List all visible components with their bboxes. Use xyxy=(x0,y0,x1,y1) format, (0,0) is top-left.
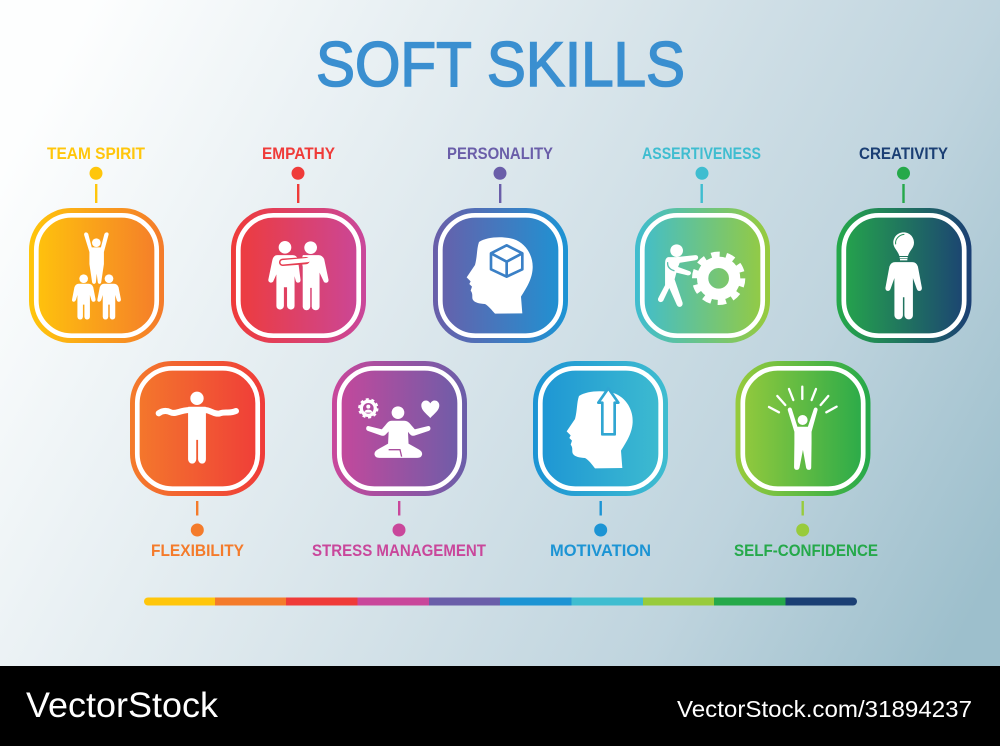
connector dot xyxy=(796,524,809,536)
heading: team spirit: TEAM SPIRIT xyxy=(47,145,145,163)
panel: flexibility xyxy=(130,361,265,560)
card xyxy=(332,361,467,496)
panel: stress management xyxy=(312,361,486,560)
heading: self-confidence: SELF-CONFIDENCE xyxy=(734,542,878,560)
icon: head with cube xyxy=(467,237,533,314)
icon: meditating person with gear and heart xyxy=(359,399,439,457)
connector dot xyxy=(594,524,607,536)
card xyxy=(231,208,366,343)
connector dot xyxy=(494,167,506,180)
heading: creativity: CREATIVITY xyxy=(859,145,948,163)
panel: team spirit xyxy=(29,145,164,343)
connector dot xyxy=(696,167,708,180)
connector line xyxy=(902,184,905,203)
icon: two people, arm on shoulder xyxy=(269,241,328,310)
icon: person pushing gear xyxy=(659,244,742,306)
card xyxy=(533,361,668,496)
connector line xyxy=(499,184,501,203)
panel: empathy xyxy=(231,145,366,343)
card xyxy=(736,361,870,496)
connector dot xyxy=(191,524,204,536)
connector dot xyxy=(292,167,304,180)
card xyxy=(433,208,568,343)
legend colour bar xyxy=(144,598,857,606)
heading: assertiveness: ASSERTIVENESS xyxy=(642,145,761,163)
connector line xyxy=(196,501,198,516)
icon: person with wavy arms xyxy=(159,392,236,463)
connector line xyxy=(398,501,400,516)
heading: personality: PERSONALITY xyxy=(447,145,553,163)
panel: assertiveness xyxy=(635,145,770,343)
icon: person with light bulb head xyxy=(886,232,921,319)
connector line xyxy=(600,501,602,516)
panel: personality xyxy=(433,145,568,343)
card xyxy=(130,361,265,496)
panel: self-confidence xyxy=(734,361,878,560)
card xyxy=(29,208,164,343)
title: SOFT SKILLS xyxy=(316,30,685,100)
connector line xyxy=(802,501,804,516)
connector dot xyxy=(897,167,910,180)
connector line xyxy=(297,184,299,203)
card xyxy=(836,208,972,343)
footer band xyxy=(0,666,1000,746)
connector dot xyxy=(392,524,406,536)
heading: empathy: EMPATHY xyxy=(262,145,335,163)
connector line xyxy=(700,184,703,203)
panel: motivation xyxy=(533,361,668,560)
icon: person with raised arms and rays xyxy=(769,387,837,469)
heading: stress management: STRESS MANAGEMENT xyxy=(312,542,486,560)
icon: three people pyramid xyxy=(73,233,120,319)
heading: flexibility: FLEXIBILITY xyxy=(151,542,244,560)
footer logo text: VectorStock xyxy=(26,686,219,725)
panel: creativity xyxy=(836,145,972,343)
connector dot xyxy=(90,167,102,180)
footer url text: VectorStock.com/31894237 xyxy=(677,696,972,722)
connector line xyxy=(95,184,97,203)
heading: motivation: MOTIVATION xyxy=(550,542,651,560)
card xyxy=(635,208,770,343)
icon: head with up arrow xyxy=(567,388,633,468)
